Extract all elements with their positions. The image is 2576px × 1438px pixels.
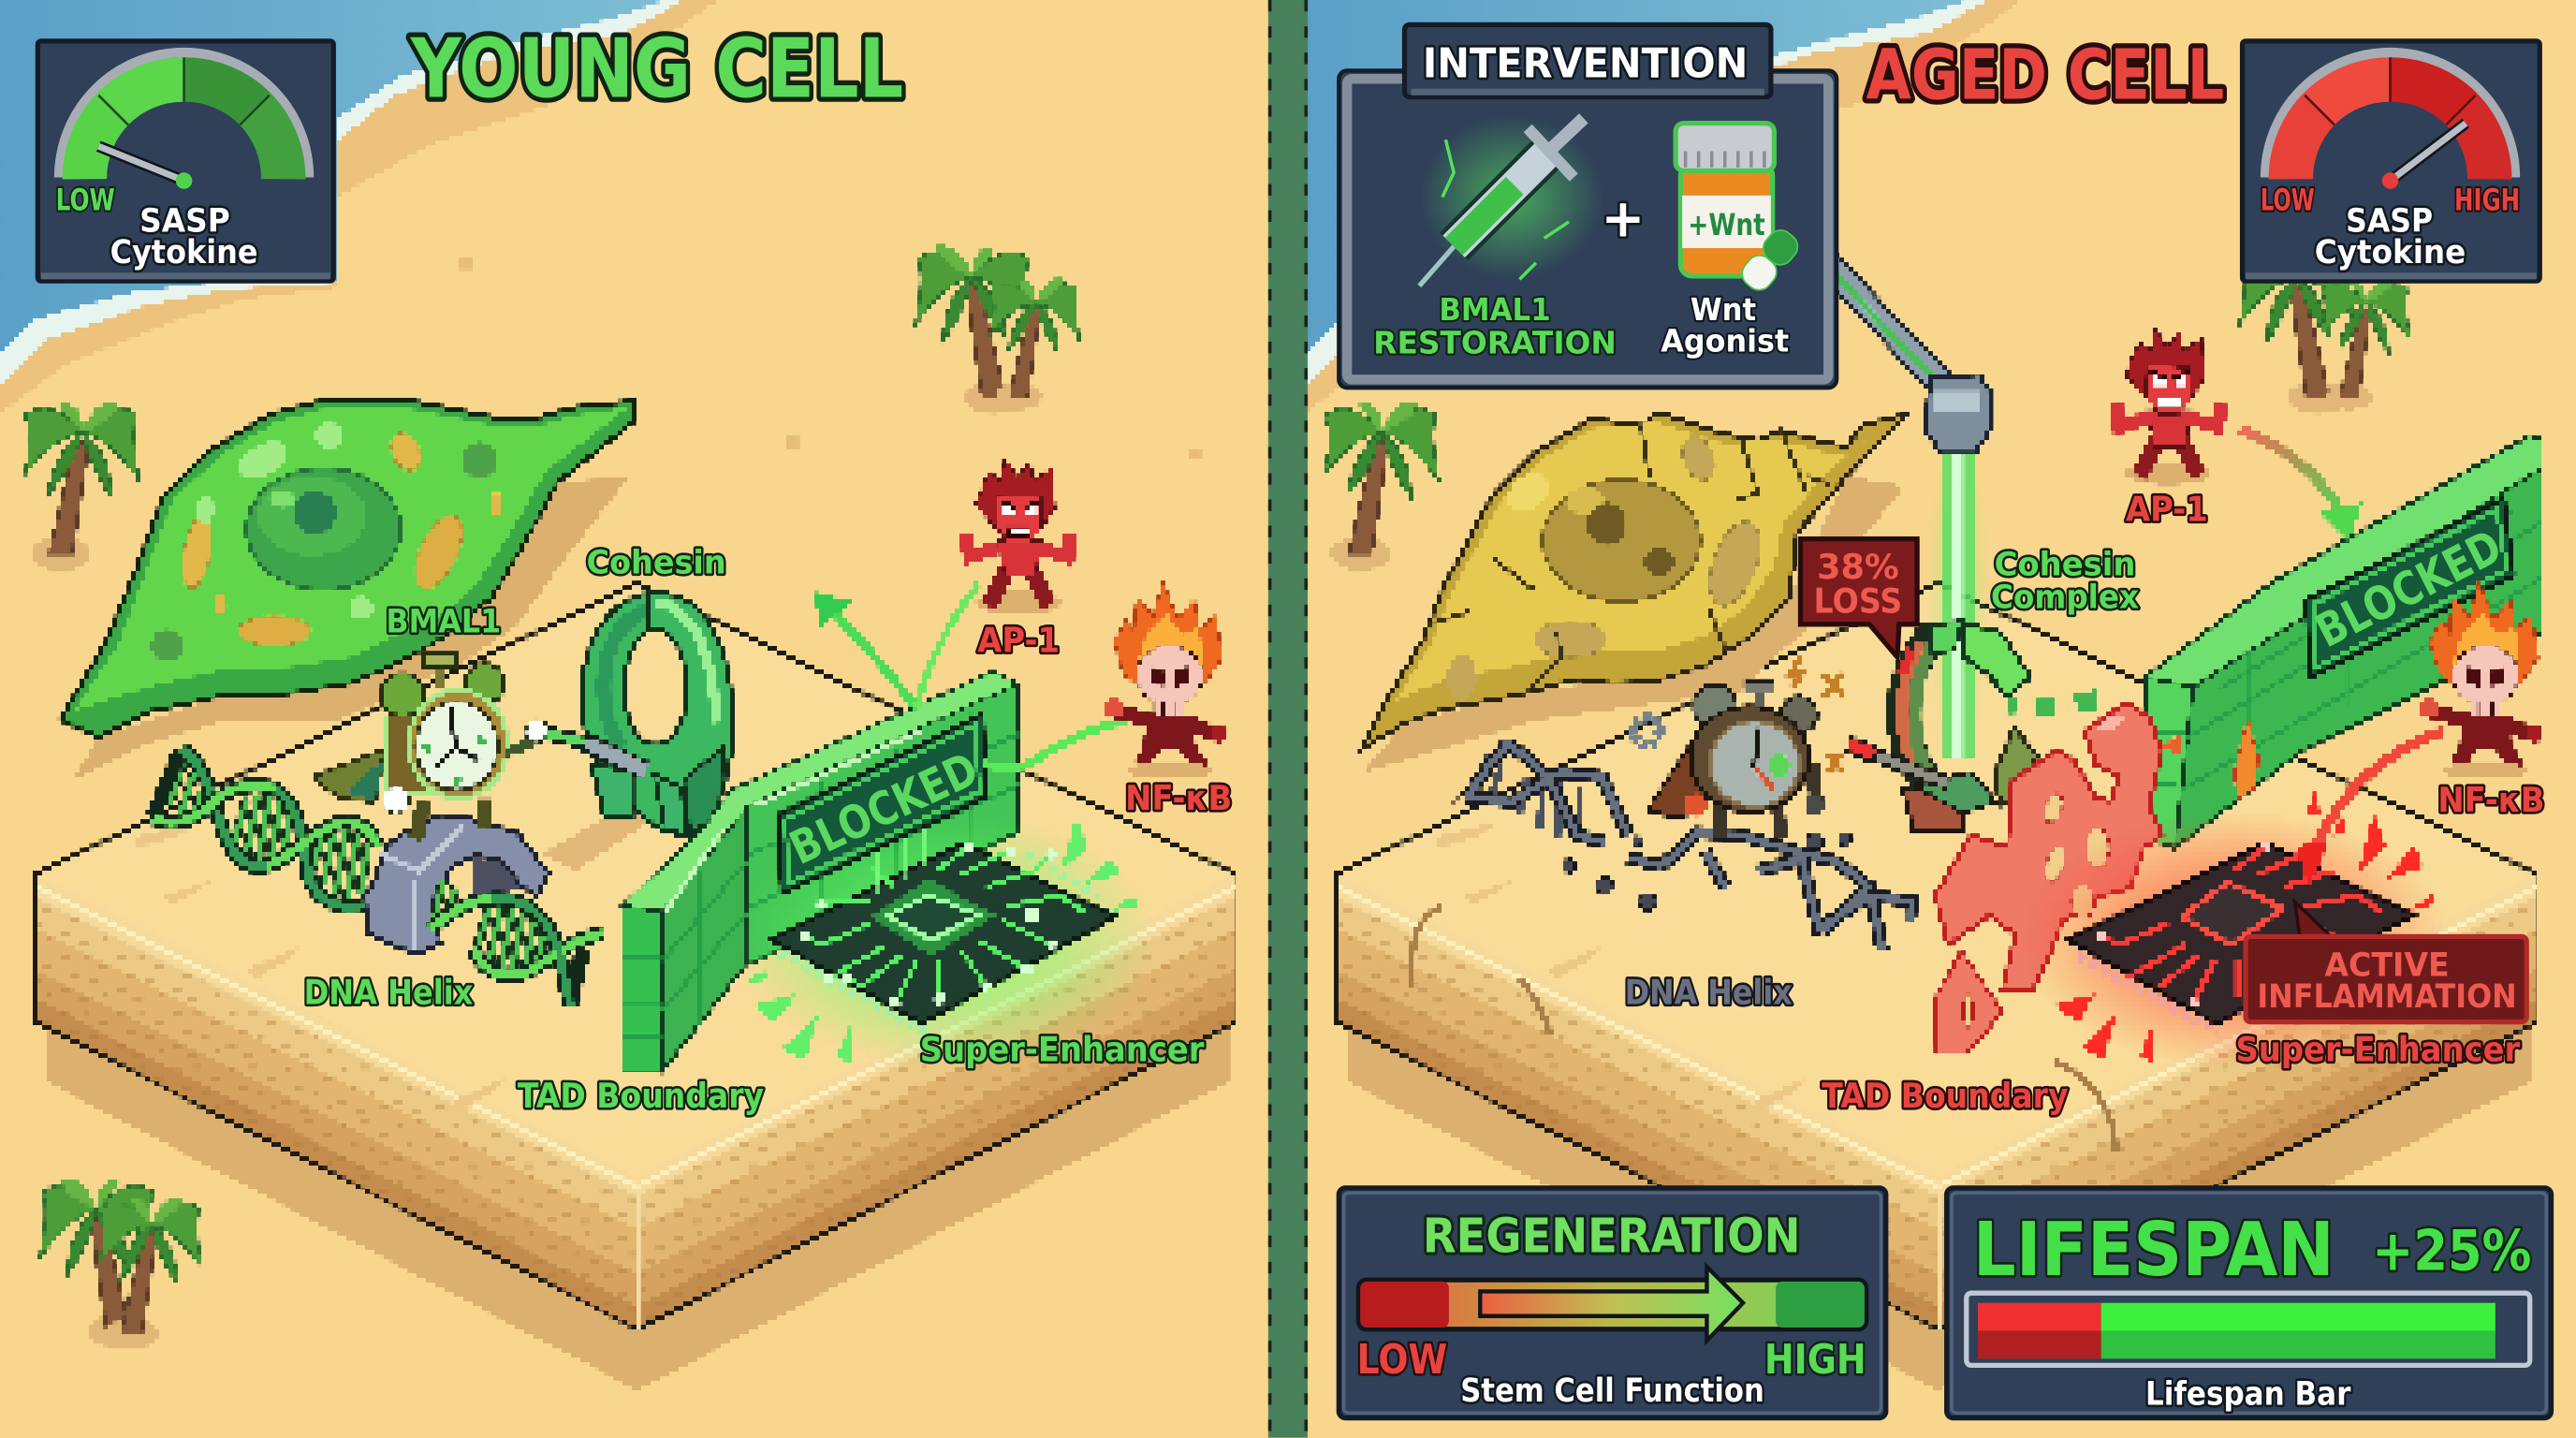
label: DNA helix: DNA Helix	[304, 972, 474, 1012]
crumbled wall aged	[1935, 703, 2162, 1053]
gauge label low: LOW	[56, 184, 115, 218]
NF-kB character aged	[2420, 583, 2543, 779]
label: low: LOW	[1357, 1336, 1447, 1384]
green deflection arrows young	[813, 583, 1125, 768]
title: young cell: YOUNG CELL	[410, 22, 903, 117]
label: super-enhancer aged: Super-Enhancer	[2236, 1030, 2521, 1070]
intervention header: INTERVENTION	[1423, 39, 1748, 87]
icon: plus: +	[1601, 189, 1645, 250]
callout: active inflammation: INFLAMMATION	[2257, 977, 2517, 1016]
label: BMAL1 restoration: RESTORATION	[1373, 324, 1617, 360]
label: BMAL1: BMAL1	[386, 603, 501, 641]
callout: 38% loss: LOSS	[1814, 581, 1902, 622]
broken DNA helix aged	[1467, 742, 1912, 951]
needle	[2382, 124, 2466, 189]
broken cohesin ring aged	[1848, 621, 2096, 831]
gauge label cytokine: Cytokine	[2315, 233, 2466, 271]
AP-1 character aged	[2115, 329, 2221, 485]
broken clock aged	[1632, 657, 1843, 838]
callout: active inflammation: ACTIVE	[2324, 946, 2450, 984]
gauge label sasp: SASP	[139, 201, 230, 240]
label: NF-kB aged: NF-κB	[2437, 780, 2544, 820]
callout: 38% loss	[1800, 539, 1917, 657]
panel: SASP gauge young	[37, 41, 333, 281]
lifespan value: +25%	[2372, 1220, 2531, 1284]
BLOCKED sign young: BLOCKED	[782, 741, 986, 875]
label: DNA helix aged: DNA Helix	[1625, 972, 1793, 1012]
BMAL1 alarm clock young	[312, 653, 646, 840]
gauge label high: HIGH	[2454, 184, 2520, 218]
icon: syringe	[1419, 115, 1603, 286]
gauge label cytokine: Cytokine	[110, 233, 258, 271]
circuit chip young	[734, 812, 1155, 1068]
right palm trees	[1325, 245, 2410, 570]
label: TAD boundary: TAD Boundary	[518, 1076, 764, 1116]
nozzle pipe and green beam	[1827, 263, 1991, 759]
lifespan title: LIFESPAN	[1973, 1207, 2334, 1293]
left palm trees	[24, 245, 1080, 1349]
label: AP-1 aged: AP-1	[2126, 489, 2208, 529]
label: high: HIGH	[1764, 1336, 1866, 1384]
labels aged cell	[1625, 36, 2544, 1116]
gauge arc	[2265, 52, 2515, 179]
callout: active inflammation	[2246, 902, 2526, 1022]
panel: regeneration	[1339, 1188, 1886, 1418]
right panel beach background	[1268, 0, 2576, 1438]
label: complex: Complex	[1991, 578, 2139, 616]
gauge label sasp: SASP	[2346, 201, 2433, 240]
young cell island platform	[37, 583, 1236, 1390]
labels young cell	[304, 22, 1232, 1116]
AP-1 character young	[966, 459, 1071, 614]
lifespan bar	[1967, 1293, 2530, 1365]
red to green blocked arrow	[2241, 429, 2363, 542]
TAD boundary wall young	[622, 672, 1018, 1071]
regeneration title: REGENERATION	[1423, 1209, 1800, 1264]
panel: SASP gauge aged	[2243, 41, 2539, 281]
needle	[98, 146, 192, 189]
label: TAD boundary aged: TAD Boundary	[1822, 1076, 2069, 1116]
aged cell island platform	[1338, 583, 2537, 1390]
cohesin ring young	[542, 594, 733, 871]
label: cohesin: Cohesin	[587, 543, 726, 581]
panel: lifespan	[1947, 1188, 2552, 1418]
label: AP-1: AP-1	[977, 621, 1060, 661]
circuit chip aged	[2021, 788, 2448, 1068]
DNA helix young	[153, 749, 378, 907]
label: lifespan bar: Lifespan Bar	[2145, 1375, 2351, 1414]
label: BMAL1 restoration	[1373, 291, 1617, 360]
label: Wnt agonist: Wnt	[1690, 291, 1756, 328]
label: NF-kB: NF-κB	[1125, 778, 1232, 818]
TAD boundary wall intact section aged	[2145, 435, 2541, 848]
label: super-enhancer: Super-Enhancer	[920, 1030, 1205, 1070]
red inflammation arrow	[2296, 731, 2443, 888]
label: stem cell function: Stem Cell Function	[1460, 1372, 1764, 1410]
young cell body	[61, 399, 636, 779]
label: Wnt agonist	[1661, 291, 1789, 360]
intervention header	[1405, 24, 1771, 97]
gauge label low: LOW	[2261, 184, 2315, 218]
regeneration bar	[1358, 1267, 1866, 1341]
callout: 38% loss: 38%	[1817, 547, 1899, 587]
divider	[1268, 0, 1308, 1438]
BLOCKED sign aged: BLOCKED	[2307, 519, 2510, 658]
icon: pill bottle	[1676, 124, 1803, 295]
icon: pill bottle: +Wnt	[1688, 209, 1765, 242]
grey arch under clock	[365, 814, 603, 1005]
label: cohesin complex: Cohesin	[1995, 545, 2135, 583]
NF-kB character young	[1104, 583, 1227, 779]
panel: intervention	[1339, 24, 1837, 388]
aged cell body	[1364, 413, 1908, 772]
title: aged cell: AGED CELL	[1866, 36, 2224, 115]
label: Wnt agonist: Agonist	[1661, 323, 1789, 360]
label: BMAL1 restoration: BMAL1	[1439, 291, 1551, 328]
gauge arc	[59, 52, 309, 179]
